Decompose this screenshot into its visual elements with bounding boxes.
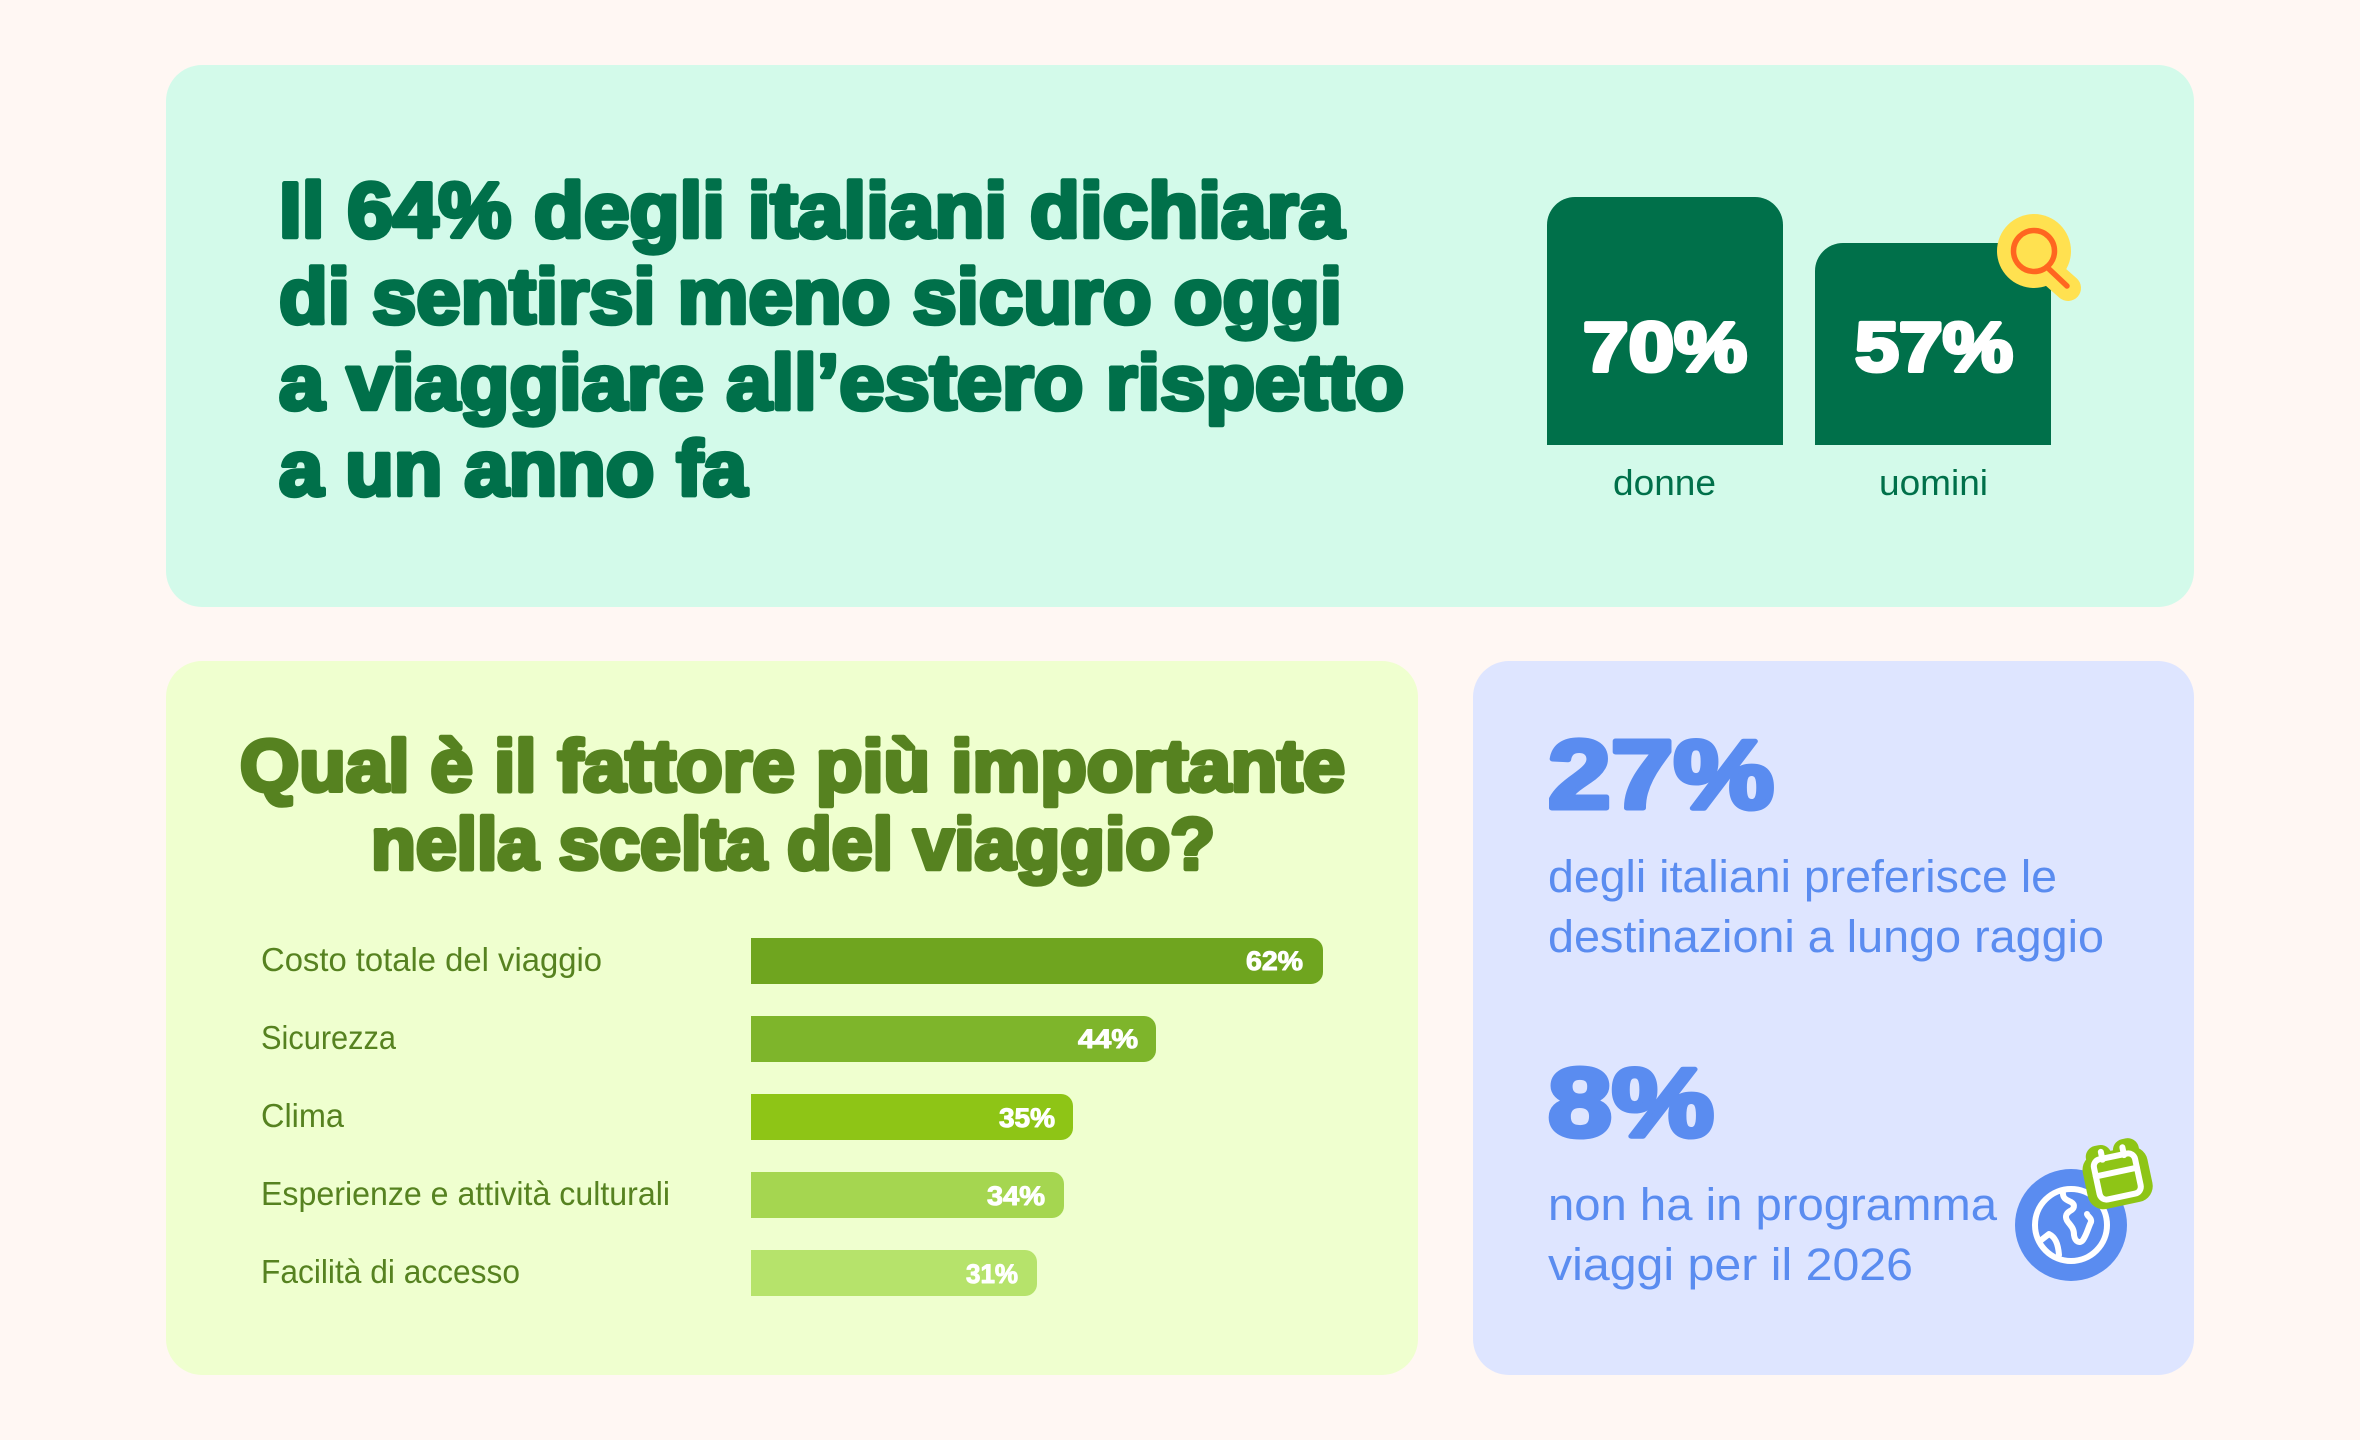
bar row: costo totale 62%: Costo totale del viaggio [261,941,602,978]
bar row: sicurezza 44%: 44% [1078,1024,1138,1054]
stat: 8%: viaggi per il 2026 [1548,1239,1913,1290]
bar row: clima 35%: 35% [999,1103,1055,1133]
icon: globe [2015,1169,2127,1281]
bar: donne 70%: donne [1613,462,1716,503]
bar row: facilità 31%: 31% [966,1259,1018,1289]
stat: 27% [1548,720,2104,962]
bar row: facilità 31% [261,1250,1037,1296]
heading: fattore più importante: Qual è il fattore più importante [240,726,1345,807]
title: 64% meno sicuro: a un anno fa [279,424,748,512]
stat: 27%: 27% [1548,720,1774,829]
panel: sicurezza all'estero [166,65,2194,607]
bar row: sicurezza 44% [261,1016,1156,1062]
bar row: esperienze 34% [261,1172,1064,1218]
bar row: costo totale 62% [261,938,1323,984]
stat: 27%: degli italiani preferisce le [1548,851,2057,902]
bar row: sicurezza 44%: Sicurezza [261,1019,397,1056]
bar row: costo totale 62%: 62% [1246,946,1303,976]
bar: donne 70% [1547,197,1783,503]
panel: destinazioni e programmi [1473,661,2194,1375]
icon: calendar [2078,1135,2156,1212]
bar: uomini 57% [1815,243,2051,503]
stat: 27%: destinazioni a lungo raggio [1548,911,2104,962]
bar row: clima 35% [261,1094,1073,1140]
bar row: esperienze 34%: Esperienze e attività culturali [261,1175,670,1212]
title: 64% meno sicuro: di sentirsi meno sicuro oggi [279,252,1342,340]
bar row: clima 35%: Clima [261,1097,345,1134]
icon: magnifying glass [1997,214,2071,288]
bar: uomini 57%: uomini [1879,462,1988,503]
bar row: esperienze 34%: 34% [987,1181,1045,1211]
heading: fattore più importante [240,726,1345,885]
title: 64% meno sicuro: a viaggiare all’estero rispetto [279,338,1404,426]
stat: 8% [1548,1048,1998,1290]
title: 64% meno sicuro: Il 64% degli italiani dichiara [279,166,1345,254]
heading: fattore più importante: nella scelta del viaggio? [371,804,1215,885]
bar: uomini 57%: 57% [1855,308,2013,386]
stat: 8%: 8% [1548,1048,1714,1157]
stat: 8%: non ha in programma [1548,1179,1998,1230]
bar row: facilità 31%: Facilità di accesso [261,1253,520,1290]
bar: donne 70%: 70% [1583,308,1747,386]
panel: fattore più importante [166,661,1418,1375]
bar chart: fattori [261,938,1323,1296]
title: 64% meno sicuro [279,166,1404,512]
